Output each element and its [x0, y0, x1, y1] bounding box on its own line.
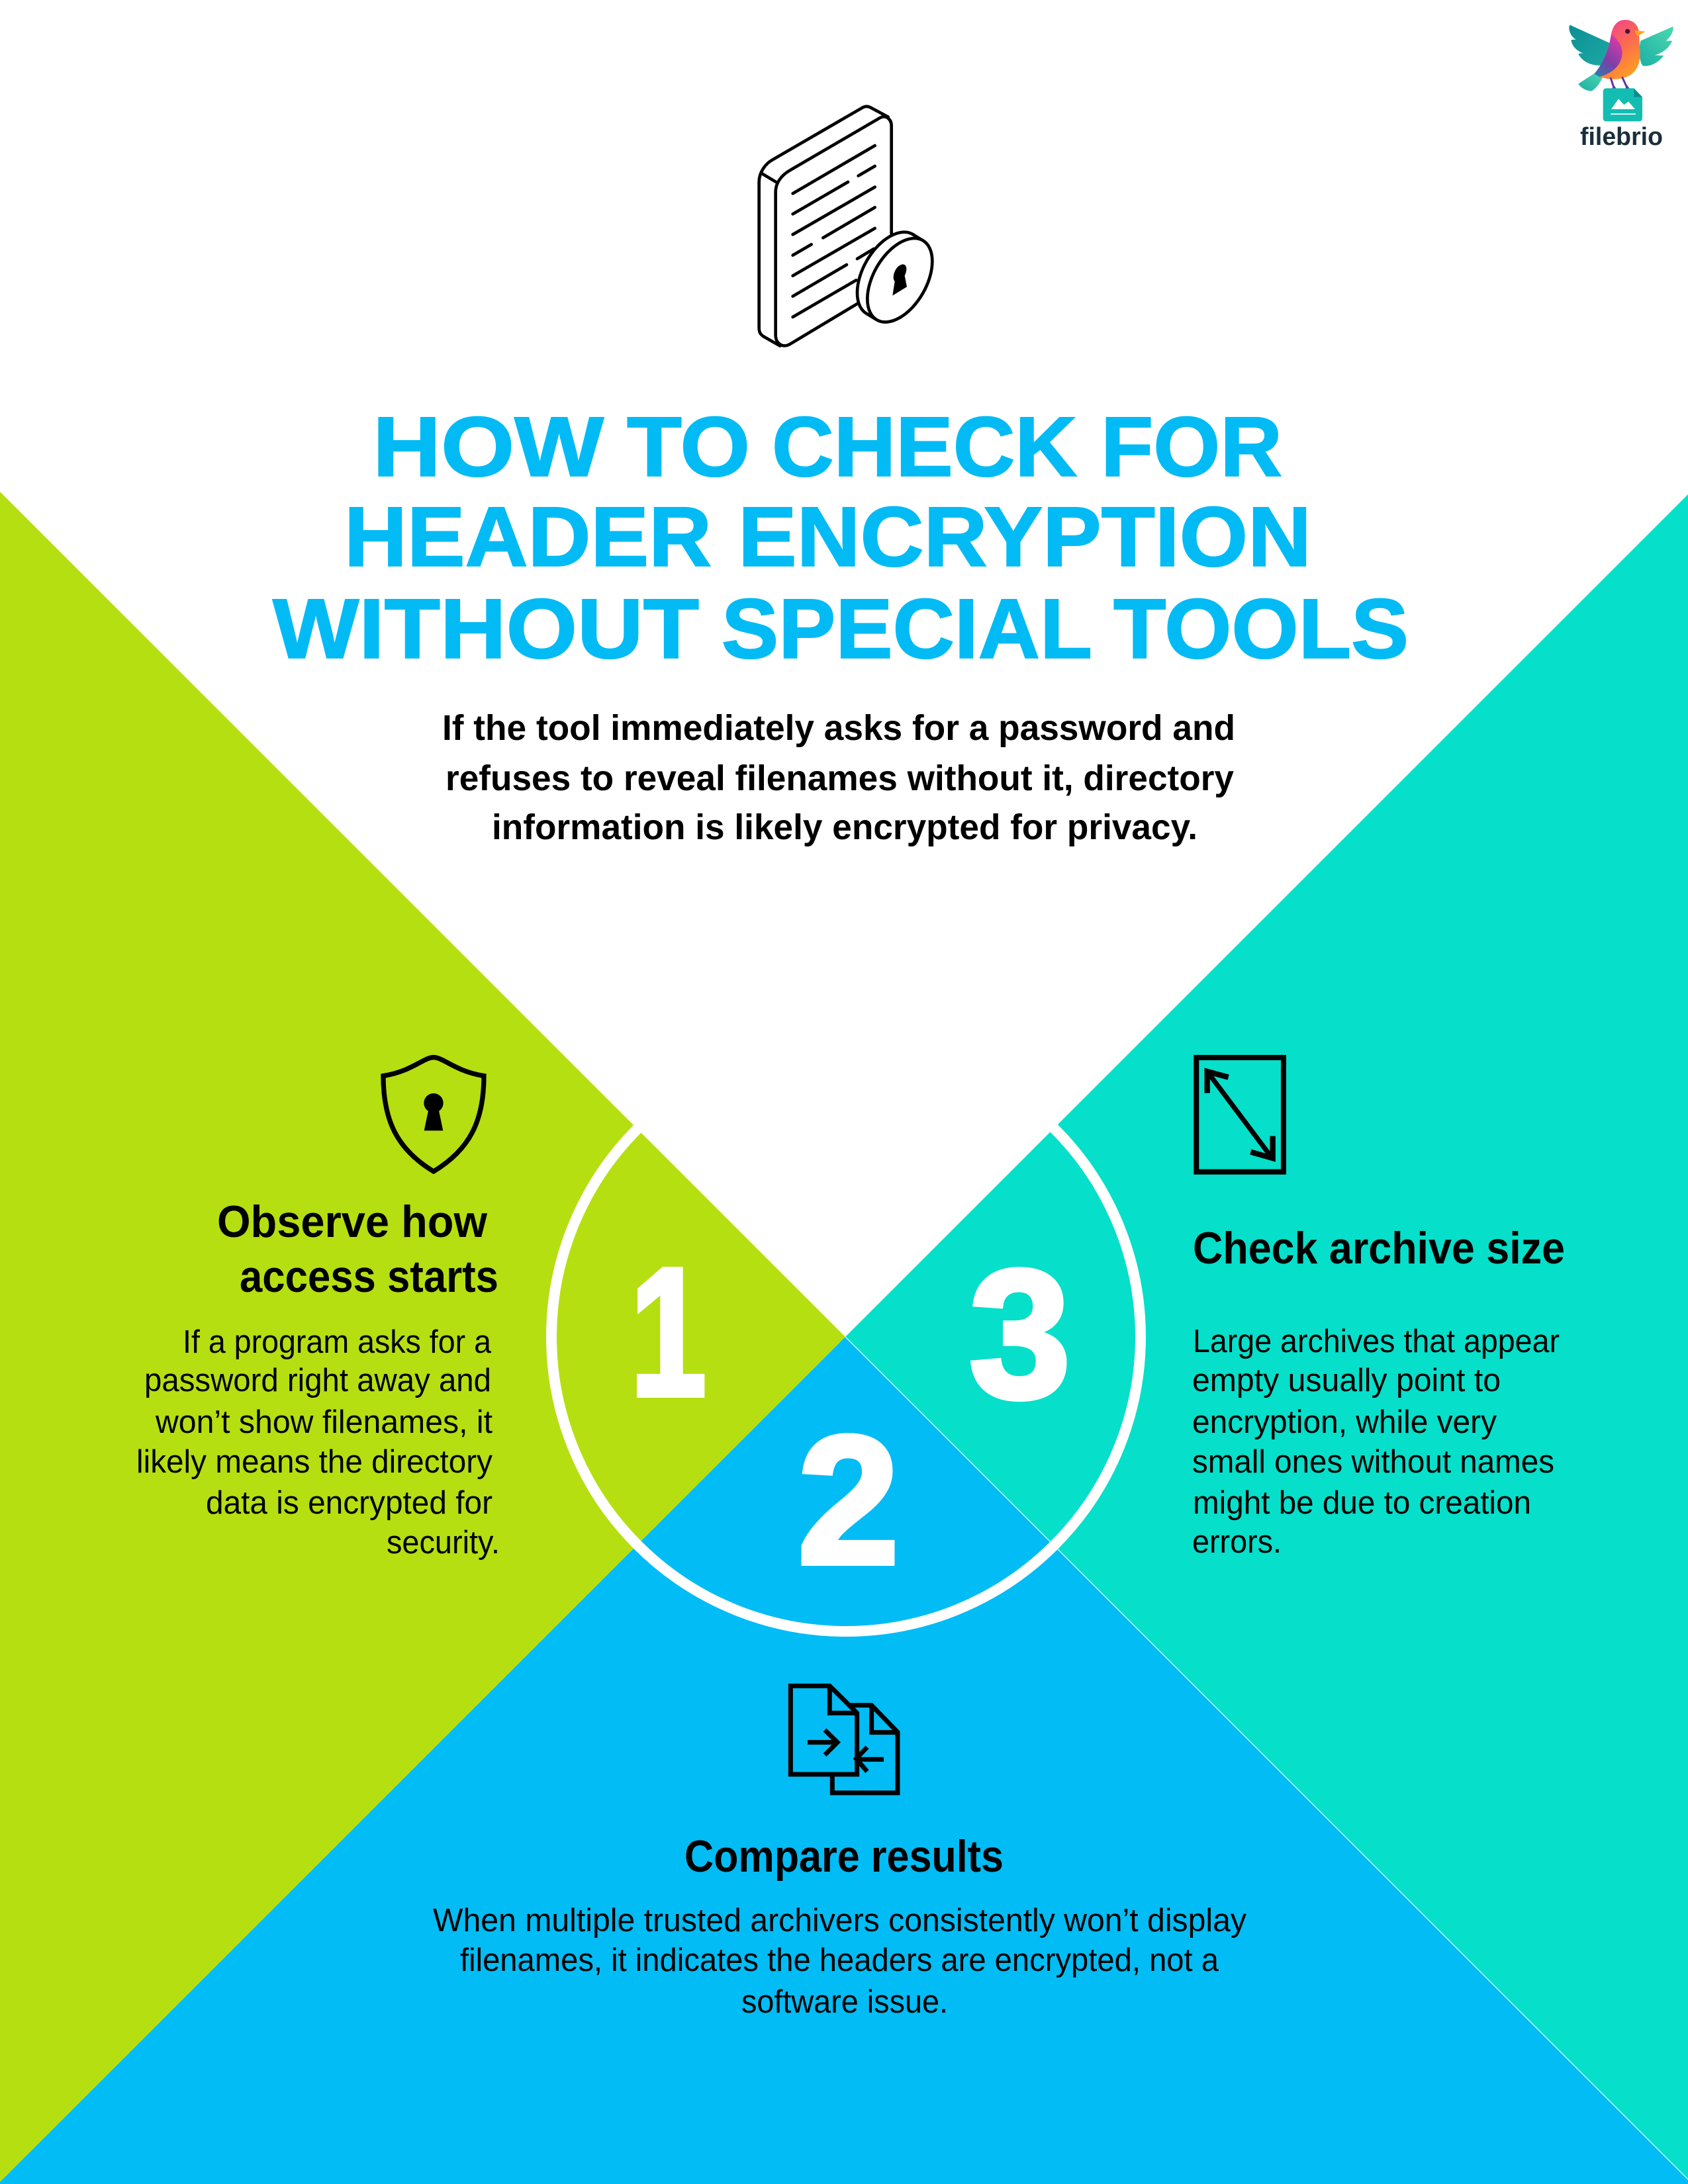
- icon: diagonal resize arrow in frame: [1196, 1058, 1284, 1172]
- icon: shield with keyhole: [383, 1058, 484, 1171]
- title: [273, 400, 1409, 676]
- text: step 3 description: errors.: [1192, 1524, 1282, 1560]
- text: step 1 description: security.: [387, 1525, 500, 1561]
- text: step 3 description: [1192, 1324, 1560, 1560]
- text: step 1 description: [136, 1324, 500, 1561]
- title: WITHOUT: [273, 582, 699, 676]
- text: step 1 description: data is encrypted for: [206, 1485, 492, 1521]
- logo: filebrio bird: [1569, 20, 1673, 121]
- text: step 1 description: won’t show filenames, it: [155, 1404, 492, 1440]
- text: step 2 description: filenames, it indicates the headers are encrypted, not a: [460, 1942, 1219, 1978]
- title: TO: [627, 400, 750, 494]
- intro text: [442, 708, 1235, 847]
- icon: two documents with exchange arrows: [790, 1686, 898, 1793]
- text: step 3 description: Large archives that appear: [1193, 1324, 1560, 1359]
- title: SPECIAL: [722, 582, 1092, 676]
- text: step 1 description: If a program asks for a: [183, 1324, 492, 1360]
- text: step 2 description: [433, 1903, 1246, 2020]
- text: step 3 description: empty usually point to: [1192, 1363, 1501, 1398]
- text: step 1 description: password right away and: [144, 1363, 491, 1398]
- icon: encrypted document with keyhole: [759, 107, 946, 346]
- text: step 3 description: small ones without names: [1192, 1444, 1554, 1480]
- intro text: information is likely encrypted for privacy.: [492, 807, 1197, 847]
- number 1: 1: [630, 1230, 706, 1434]
- panel: green wedge step 1: [0, 492, 845, 2182]
- text: step 3 description: encryption, while very: [1192, 1404, 1497, 1440]
- number 3: 3: [969, 1232, 1071, 1436]
- heading: check archive size: Check archive size: [1193, 1223, 1565, 1273]
- white ring: [551, 1042, 1141, 1631]
- title: HOW: [373, 400, 604, 494]
- panel: blue wedge step 2: [0, 1337, 1688, 2184]
- intro text: refuses to reveal filenames without it, directory: [445, 758, 1234, 798]
- title: FOR: [1101, 400, 1282, 494]
- text: step 1 description: likely means the directory: [136, 1444, 492, 1480]
- title: TOOLS: [1113, 582, 1409, 676]
- text: step 3 description: might be due to creation: [1193, 1485, 1531, 1521]
- text: step 2 description: software issue.: [741, 1984, 948, 2020]
- logo wordmark: filebrio: [1580, 123, 1663, 151]
- heading: observe how access starts: Observe how: [217, 1197, 488, 1247]
- heading: observe how access starts: access starts: [240, 1251, 498, 1302]
- number 2: 2: [798, 1398, 899, 1602]
- title: ENCRYPTION: [738, 490, 1311, 584]
- title: CHECK: [772, 400, 1077, 494]
- heading: compare results: Compare results: [684, 1831, 1004, 1882]
- title: HEADER: [344, 490, 712, 584]
- heading: observe how access starts: [217, 1197, 498, 1302]
- panel: teal wedge step 3: [845, 494, 1688, 2179]
- intro text: If the tool immediately asks for a password and: [442, 708, 1235, 748]
- text: step 2 description: When multiple trusted archivers consistently won’t display: [433, 1903, 1246, 1938]
